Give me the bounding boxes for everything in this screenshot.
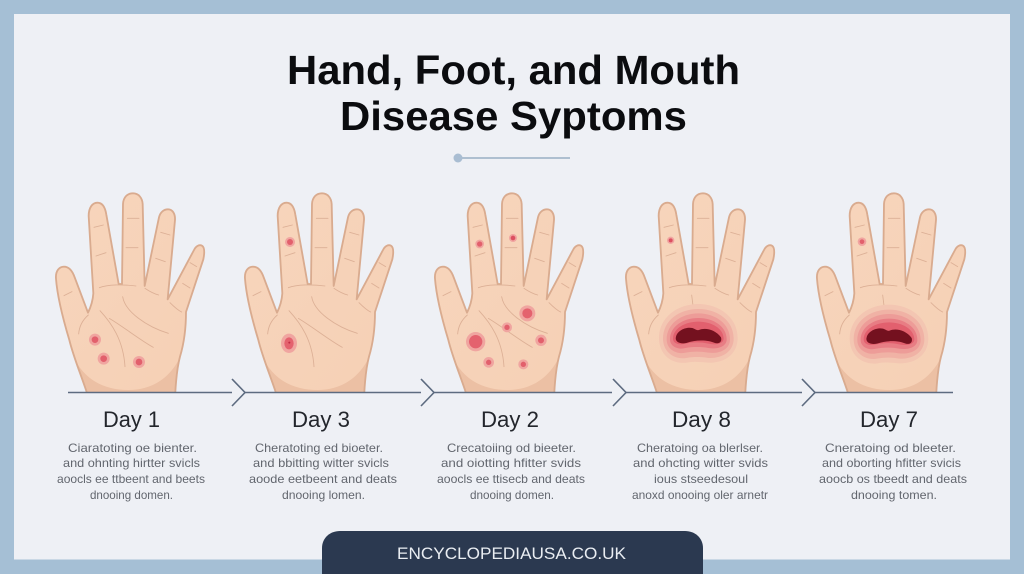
- hand: day 1: [56, 193, 204, 400]
- footer banner: [322, 531, 703, 574]
- hand: day 3: [245, 193, 393, 400]
- footer banner: ENCYCLOPEDIAUSA.CO.UK: [397, 544, 627, 563]
- label: day 7: [819, 407, 967, 502]
- title divider with dot: [454, 154, 570, 162]
- title: [287, 47, 740, 139]
- label: day 8: anoxd onooing oler arnetr: [632, 488, 768, 502]
- label: day 2: Crecatoiing od bieeter.: [447, 441, 576, 455]
- timeline arrow: [68, 379, 953, 406]
- label: day 1: dnooing domen.: [90, 488, 173, 502]
- label: day 1: Day 1: [103, 407, 160, 432]
- hand: day 7 with large lesion: [817, 193, 965, 400]
- label: day 3: aoode eetbeent and deats: [249, 472, 397, 486]
- label: day 1: Ciaratoting oe bienter.: [68, 441, 197, 455]
- label: day 8: [632, 407, 768, 502]
- hand: day 8 with large lesion: [626, 193, 774, 400]
- label: day 2: [437, 407, 585, 502]
- label: day 2: and oiotting hfitter svids: [441, 456, 581, 470]
- label: day 2: Day 2: [481, 407, 539, 432]
- label: day 8: Cheratoing oa blerlser.: [637, 441, 763, 455]
- title: Disease Syptoms: [340, 93, 687, 139]
- label: day 3: and bbitting witter svicls: [253, 456, 389, 470]
- label: day 3: dnooing lomen.: [282, 488, 365, 502]
- label: day 1: [57, 407, 205, 502]
- label: day 2: dnooing domen.: [470, 488, 554, 502]
- label: day 7: dnooing tomen.: [851, 488, 937, 502]
- label: day 3: Cheratoting ed bioeter.: [255, 441, 383, 455]
- label: day 7: Day 7: [860, 407, 918, 432]
- label: day 7: aoocb os tbeedt and deats: [819, 472, 967, 486]
- label: day 1: aoocls ee ttbeent and beets: [57, 472, 205, 486]
- label: day 3: [249, 407, 397, 502]
- label: day 8: ious stseedesoul: [654, 472, 748, 486]
- title: Hand, Foot, and Mouth: [287, 47, 740, 93]
- label: day 1: and ohnting hirtter svicls: [63, 456, 200, 470]
- label: day 8: Day 8: [672, 407, 731, 432]
- label: day 2: aoocls ee ttisecb and deats: [437, 472, 585, 486]
- label: day 8: and ohcting witter svids: [633, 456, 768, 470]
- label: day 7: Cneratoing od bleeter.: [825, 441, 956, 455]
- hand: day 2: [435, 193, 583, 400]
- label: day 3: Day 3: [292, 407, 350, 432]
- label: day 7: and oborting hfitter svicis: [822, 456, 961, 470]
